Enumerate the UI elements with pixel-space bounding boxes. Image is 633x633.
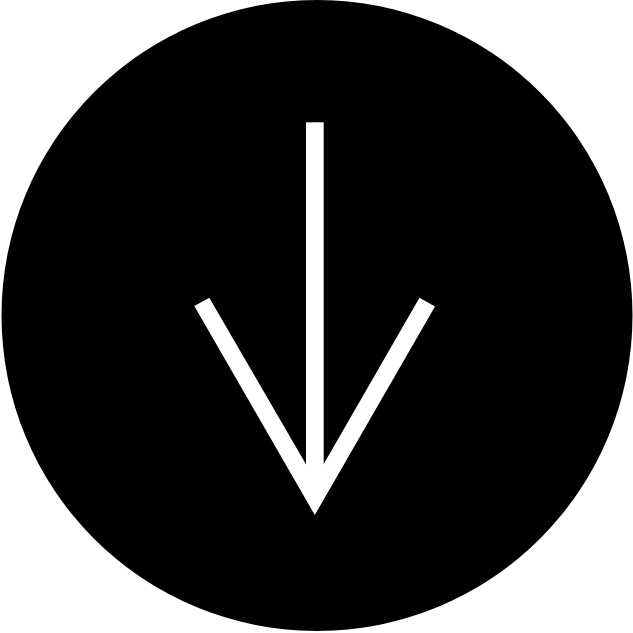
arrow: down [194, 122, 435, 515]
